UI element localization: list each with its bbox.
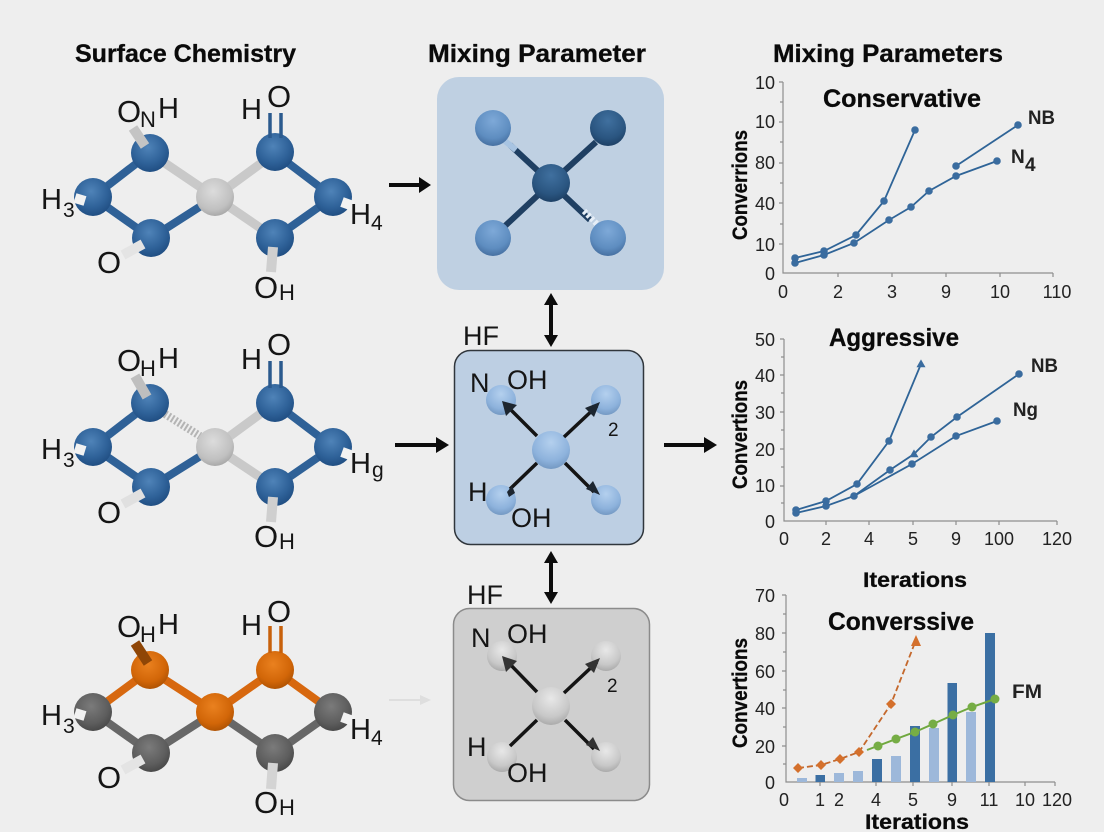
molecule: surface structure, row 3 (41, 594, 383, 820)
molecule: surface structure, row 3: H (140, 622, 156, 647)
molecule: surface structure, row 3: H (41, 700, 62, 732)
panel: mixing parameter, structure 2: N (470, 368, 490, 398)
heading: Mixing Parameter: Mixing Parameter (428, 40, 646, 68)
chart: Conservative line chart: 9 (941, 282, 951, 302)
chart: Conversive bar and line chart: 70 (755, 586, 775, 606)
chart: Conversive bar and line chart: 9 (947, 790, 957, 810)
molecule: surface structure, row 2: H (140, 356, 156, 381)
chart: Aggressive line chart (729, 324, 1072, 549)
molecule: surface structure, row 2: O (97, 495, 121, 530)
molecule: surface structure, row 1: H (241, 94, 262, 126)
molecule: surface structure, row 1 (41, 79, 383, 305)
arrow: faint, row 3 to panel 3 (389, 695, 431, 705)
arrow: row 2 to panel 2 (395, 437, 449, 453)
chart: Aggressive line chart: Aggressive (829, 324, 959, 352)
chart: Conversive bar and line chart: 10 (1015, 790, 1035, 810)
panel: mixing parameter, structure 3: N (471, 623, 490, 653)
molecule: surface structure, row 2: H (241, 344, 262, 376)
molecule: surface structure, row 1: O (267, 79, 291, 114)
chart: Conservative line chart: 40 (755, 194, 775, 214)
chart: Aggressive line chart: NB (1031, 356, 1058, 377)
molecule: surface structure, row 1: 3 (63, 199, 75, 222)
chart: Conservative line chart: 80 (755, 153, 775, 173)
molecule: surface structure, row 3: H (241, 610, 262, 642)
molecule: surface structure, row 2: O (117, 343, 141, 378)
chart: Aggressive line chart: 5 (908, 529, 918, 549)
panel: mixing parameter, structure 3: 2 (607, 676, 618, 697)
molecule: surface structure, row 2: H (41, 434, 62, 466)
panel: mixing parameter, structure 3: H (467, 732, 486, 762)
chart: Conservative line chart: 3 (887, 282, 897, 302)
chart: Conservative line chart: 2 (833, 282, 843, 302)
chart: Conservative line chart: 4 (1025, 155, 1036, 176)
molecule: surface structure, row 3: O (117, 609, 141, 644)
heading: Surface Chemistry: Surface Chemistry (75, 40, 296, 68)
chart: Conversive bar and line chart: 40 (755, 699, 775, 719)
chart: Conservative line chart: 10 (755, 73, 775, 93)
chart: Conversive bar and line chart: 4 (871, 790, 881, 810)
molecule: surface structure, row 1: O (254, 270, 278, 305)
chart: Conversive bar and line chart: 120 (1042, 790, 1072, 810)
molecule: surface structure, row 3: 4 (371, 727, 383, 750)
chart: Aggressive line chart: 4 (864, 529, 874, 549)
chart: Aggressive line chart: 2 (821, 529, 831, 549)
molecule: surface structure, row 2: 3 (63, 449, 75, 472)
chart: Conservative line chart (729, 73, 1071, 302)
chart: Conservative line chart: Converrions (729, 130, 752, 240)
chart: Conversive bar and line chart: 5 (908, 790, 918, 810)
arrow: row 1 to panel 1 (389, 177, 431, 193)
panel: mixing parameter, structure 2: OH (507, 365, 548, 395)
chart: Conservative line chart: 10 (755, 112, 775, 132)
molecule: surface structure, row 3: O (267, 594, 291, 629)
molecule: surface structure, row 2: H (350, 448, 371, 480)
panel: mixing parameter, structure 2: H (468, 477, 488, 507)
label: HF above panel 2: HF (463, 321, 499, 351)
chart: Conversive bar and line chart: 0 (779, 790, 789, 810)
molecule: surface structure, row 3: H (350, 714, 371, 746)
chart: Conversive bar and line chart: 0 (765, 773, 775, 793)
panel: mixing parameter, structure 3: OH (507, 758, 548, 788)
chart: Conservative line chart: 10 (990, 282, 1010, 302)
panel: mixing parameter, structure 2 (454, 350, 644, 544)
chart: Conservative line chart: 0 (765, 264, 775, 284)
chart: Conversive bar and line chart: 2 (834, 790, 844, 810)
molecule: surface structure, row 3: O (97, 760, 121, 795)
molecule: surface structure, row 2: O (267, 327, 291, 362)
chart: Conversive bar and line chart: Converssive (828, 608, 974, 636)
molecule: surface structure, row 3: O (254, 785, 278, 820)
molecule: surface structure, row 2: g (372, 459, 384, 482)
chart: Aggressive line chart: 0 (779, 529, 789, 549)
panel: mixing parameter, structure 2: 2 (608, 420, 619, 441)
molecule: surface structure, row 2: H (158, 343, 179, 375)
chart: Conservative line chart: Conservative (823, 85, 981, 113)
molecule: surface structure, row 3: H (279, 795, 295, 820)
chart: Conversive bar and line chart: 60 (755, 662, 775, 682)
chart: Aggressive line chart: 9 (951, 529, 961, 549)
molecule: surface structure, row 1: H (279, 280, 295, 305)
molecule: surface structure, row 2: O (254, 519, 278, 554)
chart: Aggressive line chart: 40 (755, 366, 775, 386)
molecule: surface structure, row 1: 4 (371, 212, 383, 235)
chart: Aggressive line chart: 100 (984, 529, 1014, 549)
chart: Aggressive line chart: 120 (1042, 529, 1072, 549)
chart: Conversive bar and line chart: 1 (815, 790, 825, 810)
arrow: double, panel 2 and panel 3 (544, 551, 558, 604)
molecule: surface structure, row 1: N (140, 107, 156, 132)
molecule: surface structure, row 1: O (117, 94, 141, 129)
chart: Aggressive line chart: 50 (755, 330, 775, 350)
heading: Mixing Parameters: Mixing Parameters (773, 40, 1003, 68)
molecule: surface structure, row 2: H (279, 529, 295, 554)
chart: Conversive bar and line chart: 20 (755, 737, 775, 757)
molecule: surface structure, row 3: H (158, 609, 179, 641)
chart: Conservative line chart: 110 (1043, 282, 1071, 302)
chart: Conservative line chart: N (1011, 147, 1025, 168)
chart: Conservative line chart: 0 (778, 282, 788, 302)
arrow: panel 2 to charts (664, 437, 717, 453)
panel: mixing parameter, structure 1 (437, 77, 664, 290)
chart: Aggressive line chart: 0 (765, 512, 775, 532)
label: HF above panel 3: HF (467, 580, 503, 610)
chart: Conversive bar and line chart: 11 (980, 790, 998, 810)
molecule: surface structure, row 1: O (97, 245, 121, 280)
chart: Conversive bar and line chart (729, 569, 1072, 832)
panel: mixing parameter, structure 3: OH (507, 619, 548, 649)
chart: Aggressive line chart: Ng (1013, 400, 1038, 421)
molecule: surface structure, row 2 (41, 327, 384, 554)
chart: Conversive bar and line chart: Iterations (863, 569, 967, 592)
chart: Aggressive line chart: 20 (755, 440, 775, 460)
chart: Conversive bar and line chart: FM (1012, 682, 1042, 703)
arrow: double, panel 1 and panel 2 (544, 293, 558, 347)
panel: mixing parameter, structure 2: OH (511, 503, 552, 533)
chart: Conservative line chart: 10 (755, 235, 775, 255)
chart: Aggressive line chart: Convertions (729, 380, 752, 489)
chart: Aggressive line chart: 30 (755, 403, 775, 423)
molecule: surface structure, row 3: 3 (63, 715, 75, 738)
molecule: surface structure, row 1: H (41, 184, 62, 216)
molecule: surface structure, row 1: H (350, 199, 371, 231)
chart: Conversive bar and line chart: Convertions (729, 638, 752, 748)
chart: Conservative line chart: NB (1028, 108, 1055, 129)
chart: Conversive bar and line chart: 80 (755, 624, 775, 644)
molecule: surface structure, row 1: H (158, 93, 179, 125)
chart: Aggressive line chart: 10 (755, 476, 775, 496)
panel: mixing parameter, structure 3 (454, 608, 650, 800)
